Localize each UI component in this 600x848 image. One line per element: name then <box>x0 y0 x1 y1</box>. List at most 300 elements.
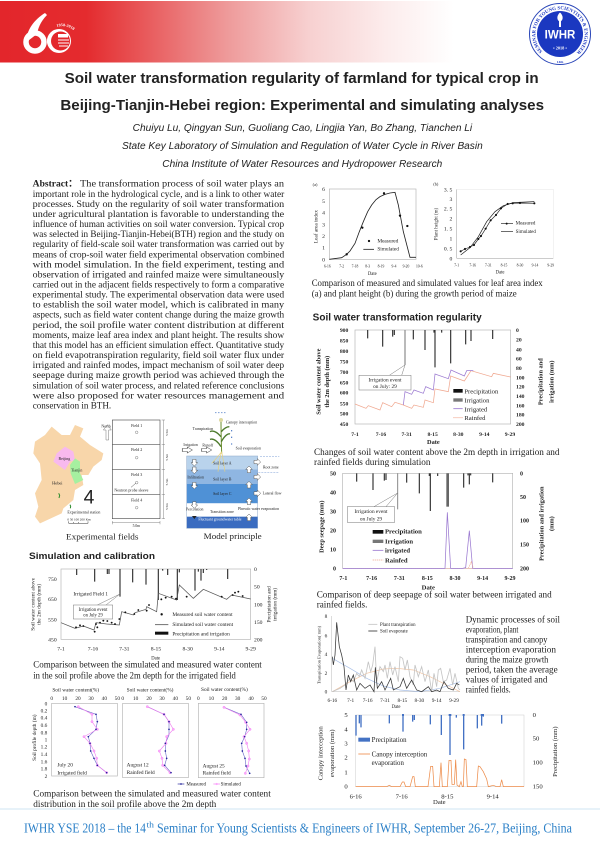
experimental fields: map <box>33 425 103 523</box>
chart b: plant height: 7-1 <box>454 264 459 268</box>
abstract text: seepage during maize growth period was achieved through the <box>33 371 284 381</box>
legend: irrigated <box>385 548 410 555</box>
callout: irrigation event <box>359 365 411 390</box>
chart: canopy interception evaporation: 4 <box>344 726 348 733</box>
chart: soil water content under irrigation and rainfed: the 2m depth (mm) <box>324 356 331 408</box>
legend <box>501 222 536 235</box>
experimental fields: field layout: North <box>101 424 111 429</box>
legend: Irrigated <box>464 406 488 413</box>
chart: soil water content, irrigated field: 150 <box>254 620 263 626</box>
chart: evaporation and transpiration: 6 <box>325 633 328 639</box>
chart a: leaf area index: 5 <box>322 199 325 205</box>
chart: soil water content, irrigated field: the 2m depth (mm) <box>35 584 42 625</box>
chart: soil water content under irrigation and rainfed: 700 <box>340 370 349 376</box>
legend: Simulated <box>516 230 536 235</box>
abstract text: simulation of soil water process, and related reference conclusions <box>33 380 285 391</box>
precipitation bars <box>77 569 228 600</box>
chart: soil water content under irrigation and rainfed: 850 <box>340 339 349 345</box>
chart: soil water content, irrigated field: 550 <box>48 617 57 623</box>
chart: soil water content under irrigation and rainfed: 500 <box>340 412 349 418</box>
legend: Plant transpiration <box>380 623 416 628</box>
chart b: plant height: 9-29 <box>547 264 554 268</box>
chart: soil profile water content distribution: 2 <box>45 774 48 780</box>
chart: soil water content under irrigation and rainfed: 600 <box>340 391 349 397</box>
chart a: leaf area index: 2 <box>322 234 325 240</box>
chart: soil profile water content distribution: 20 <box>222 696 228 702</box>
caption: profile comparison: distribution in the soil profile above the 2m depth <box>33 799 217 810</box>
legend: Simulated <box>221 783 241 788</box>
precipitation bars <box>356 715 502 755</box>
text block: dynamic processes: evaporation, plant <box>466 625 519 636</box>
model principle diagram: Soil evaporation <box>236 446 261 450</box>
chart a: leaf area index <box>312 182 423 277</box>
logo: IWHR YSE badge: 14th <box>557 60 563 64</box>
chart b: plant height: 9-14 <box>532 264 539 268</box>
chart a: leaf area index: 8-19 <box>378 265 385 269</box>
chart: soil profile water content distribution: 0 <box>45 701 48 707</box>
chart: canopy interception evaporation: 150 <box>533 784 543 791</box>
chart: soil water content, irrigated field: 650 <box>48 597 57 603</box>
abstract text: irrigated and rainfed modes, impact mechanism of soil water deep <box>33 360 285 371</box>
experimental fields: field layout: Neutron probe sleeve <box>114 488 149 493</box>
chart a: leaf area index: Date <box>368 272 377 277</box>
chart: soil water content under irrigation and rainfed: 7-16 <box>376 432 386 438</box>
chart a: leaf area index: 7-18 <box>352 265 359 269</box>
chart: soil water content, irrigated field: Date <box>151 656 160 661</box>
abstract text: to establish the soil water model, which is calibrated in many <box>33 301 285 311</box>
chart: soil water content under irrigation and rainfed: 160 <box>516 403 525 409</box>
precipitation and irrigation bars <box>368 330 493 367</box>
chart b: plant height: 2. 5 <box>444 207 453 213</box>
chart: soil water content under irrigation and rainfed: 450 <box>340 422 349 428</box>
legend: Measured <box>516 222 536 227</box>
chart: soil water content, irrigated field: 750 <box>48 577 57 583</box>
chart: evaporation and transpiration: 7-16 <box>363 698 373 704</box>
model principle diagram: Root zone <box>263 465 279 469</box>
abstract text: aspects, such as field water content change during the maize growth <box>33 310 285 321</box>
chart: soil profile water content distribution: Soil water content(%) <box>127 686 174 693</box>
caption: irrigation vs rainfed: Changes of soil water content above the 2m depth in irrigation and <box>314 447 560 458</box>
chart: soil water content, irrigated field: 7-16 <box>88 647 98 653</box>
chart: soil water content under irrigation and rainfed: 7-1 <box>351 432 359 438</box>
chart: soil water content under irrigation and rainfed: 550 <box>340 401 349 407</box>
legend <box>363 239 399 252</box>
header banner <box>0 1 454 62</box>
chart: soil profile water content distribution: 40 <box>248 696 254 702</box>
abstract text: that this model has an efficient simulation effect. Quantitative study <box>33 340 285 351</box>
legend: Precipitation <box>372 737 407 744</box>
chart: canopy interception evaporation: Precipitation (mm) <box>552 726 559 777</box>
text block: dynamic processes <box>466 615 560 695</box>
chart: deep seepage: 7-1 <box>339 576 347 582</box>
legend <box>155 612 234 637</box>
legend <box>358 737 428 767</box>
chart: soil profile water content distribution: Rainfed field <box>127 769 155 776</box>
legend: Precipitation <box>464 388 499 395</box>
chart: canopy interception evaporation: 0 <box>344 784 348 791</box>
model principle diagram: Transition zone <box>210 510 234 514</box>
model principle diagram: Soil layer A <box>213 462 232 466</box>
abstract text: on field evapotranspiration regularity, field soil water flux under <box>33 350 285 361</box>
chart: evaporation and transpiration: 0 <box>325 690 328 696</box>
chart b: plant height <box>433 181 554 275</box>
chart: canopy interception evaporation: 5 <box>344 712 348 719</box>
chart: soil water content under irrigation and rainfed: 20 <box>516 338 522 344</box>
abstract text: under agricultural plantation is favorable to understanding the <box>33 209 284 220</box>
captions: experimental fields and model principle <box>66 531 262 542</box>
abstract text: influence of human activities on soil water conversion. Typical crop <box>33 219 285 230</box>
legend <box>368 623 416 635</box>
chart: evaporation and transpiration: 7-31 <box>380 698 390 704</box>
chart: deep seepage: 10 <box>330 547 336 553</box>
chart: deep seepage: Precipitation and irrigation <box>538 486 545 561</box>
chart a: leaf area index: 3 <box>322 222 325 228</box>
chart: soil water content under irrigation and rainfed: 750 <box>340 359 349 365</box>
chart: soil water content, irrigated field: Irrigated Field 1 <box>73 591 108 597</box>
chart: deep seepage: 9-29 <box>505 576 515 582</box>
experimental fields: field layout <box>101 420 169 528</box>
chart: canopy interception evaporation: evaporation (mm) <box>329 729 336 777</box>
chart: soil profile water content distribution: 30 <box>88 696 94 702</box>
chart: soil water content, irrigated field: 7-1 <box>57 647 65 653</box>
chart: soil water content under irrigation and rainfed: 200 <box>516 422 525 428</box>
chart: deep seepage: 7-16 <box>366 576 377 582</box>
experimental fields: field layout: Field 2 <box>131 447 142 452</box>
experimental fields: map: Experimental station <box>67 510 100 515</box>
model principle diagram: Runoff <box>202 444 214 448</box>
abstract text: means of crop-soil water field experimental observation combined <box>33 249 285 260</box>
caption: irrigated field comparison: Comparison between the simulated and measured water content <box>33 660 262 670</box>
chart: soil water content under irrigation and rainfed: 9-14 <box>479 432 490 438</box>
chart: soil water content under irrigation and rainfed: 8-30 <box>453 432 464 438</box>
abstract text: experimental study. The experimental observation data were used <box>33 291 285 301</box>
chart: soil water content, irrigated field: 450 <box>48 637 57 643</box>
abstract text: was selected in Beijing-Tianjin-Hebei(BTH) region and the study on <box>33 229 284 240</box>
chart: evaporation and transpiration: 4 <box>325 652 328 658</box>
caption: deep seepage: rainfed fields. <box>317 600 367 610</box>
model principle diagram: Soil layer C <box>213 492 232 496</box>
experimental fields: field layout: 5.5m <box>165 478 169 485</box>
chart: evaporation and transpiration: 9-29 <box>449 698 459 704</box>
model principle diagram: Infiltration <box>187 476 204 480</box>
chart: deep seepage: 20 <box>330 528 336 534</box>
chart: soil profile water content distribution: 50 <box>186 696 191 702</box>
chart: soil profile water content distribution: July 20 <box>57 762 73 768</box>
heading: soil water transformation regularity: Soil water transformation regularity <box>313 313 482 324</box>
logo: IWHR YSE badge: • 2018 • <box>553 46 567 50</box>
chart: soil water content, irrigated field: irrigation (mm) <box>271 588 278 621</box>
callout: irrigation event: on July 29 <box>83 614 103 619</box>
chart: deep seepage: 8-30 <box>450 576 460 582</box>
chart a: leaf area index: (a) <box>313 182 318 187</box>
experimental fields: field layout: Field 3 <box>131 472 142 477</box>
chart: soil water content, irrigated field: 200 <box>254 637 263 643</box>
chart: soil water content, irrigated field: Soil water content above <box>31 577 37 631</box>
caption: deep seepage <box>317 590 552 610</box>
experimental fields: map: Beijing <box>58 456 70 461</box>
chart a: leaf area index: 9-4 <box>392 265 397 269</box>
experimental fields: field layout: 5.5m <box>165 429 169 436</box>
chart: evaporation and transpiration: Date <box>392 705 400 710</box>
caption: irrigated field comparison: in the soil profile above the 2m depth for the irrigated field <box>33 670 236 681</box>
title: Beijing-Tianjin-Hebei region: Experimental and simulating analyses <box>60 98 544 114</box>
legend: Precipitation and irrigation <box>172 631 230 637</box>
chart: soil water content under irrigation and rainfed: 9-29 <box>505 432 515 438</box>
chart a: leaf area index: 10-6 <box>416 265 423 269</box>
authors and affiliations: China Institute of Water Resources and Hydropower Research <box>162 159 442 170</box>
caption: LAI and plant height <box>312 278 543 300</box>
chart: soil water content under irrigation and rainfed: 140 <box>516 394 525 400</box>
legend: Irrigation <box>464 397 490 404</box>
chart: canopy interception evaporation: 9-14 <box>487 793 499 800</box>
chart: soil water content, irrigated field: 9-14 <box>214 647 225 653</box>
chart b: plant height: 2 <box>450 217 453 223</box>
abstract text: observation of irrigated and rainfed maize were simultaneously <box>33 269 285 280</box>
chart: soil water content, irrigated field: 9-29 <box>245 647 256 653</box>
model principle diagram: Phreatic water evaporation <box>238 507 279 511</box>
text block: dynamic processes: interception evaporation <box>466 645 556 656</box>
chart: soil profile water content distribution: 1.4 <box>41 752 48 758</box>
chart: soil profile water content distribution: 0.6 <box>41 723 48 729</box>
chart: soil water content under irrigation and rainfed: 180 <box>516 413 525 419</box>
chart b: plant height: 3 <box>450 197 453 203</box>
chart b: plant height: 1. 5 <box>444 227 453 233</box>
chart: evaporation and transpiration: 8 <box>325 614 328 620</box>
chart a: leaf area index: 8-3 <box>365 265 370 269</box>
logo: 60th anniversary <box>23 13 75 54</box>
heading: simulation and calibration: Simulation and calibration <box>29 551 155 562</box>
legend: Irrigation <box>385 538 413 545</box>
chart b: plant height: 1 <box>450 237 453 243</box>
chart: evaporation and transpiration: Transpiration Evaporation( mm) <box>316 625 321 684</box>
chart: deep seepage: 40 <box>330 490 336 496</box>
chart: soil profile water content distribution: 50 <box>115 696 120 702</box>
chart: soil profile water content distribution: Soil profile depth (m) <box>31 714 38 761</box>
chart: deep seepage: 0 <box>333 566 336 572</box>
callout: irrigation event: Irrigation event <box>354 509 388 515</box>
footer text: th <box>146 820 154 830</box>
caption: profile comparison <box>33 789 271 810</box>
chart a: leaf area index: Leaf area index <box>312 210 319 243</box>
chart: soil profile water content distribution: 0 <box>50 696 53 702</box>
chart: soil profile water content distribution: 30 <box>159 696 165 702</box>
model principle diagram: Soil layer B <box>213 477 232 481</box>
chart: soil profile water content distribution: 20 <box>146 696 152 702</box>
abstract text: with model simulation. In the field experiment, testing and <box>33 259 285 270</box>
abstract text: carried out in the adjacent fields respectively to form a comparative <box>33 280 284 290</box>
chart: soil profile water content distribution: 0 <box>197 696 200 702</box>
chart: soil profile water content distribution: 50 <box>261 696 267 702</box>
captions: experimental fields and model principle: Experimental fields <box>66 532 138 542</box>
legend: Measured <box>186 783 206 788</box>
authors and affiliations <box>122 123 483 170</box>
chart: soil water content under irrigation and rainfed: 7-31 <box>401 432 412 438</box>
chart: soil profile water content distribution <box>31 686 267 788</box>
chart a: leaf area index: 1 <box>322 246 325 252</box>
caption: LAI and plant height: Comparison of measured and simulated values for leaf area index <box>312 278 543 289</box>
chart: soil profile water content distribution: 40 <box>102 696 107 702</box>
legend: Simulated <box>377 246 399 252</box>
chart: evaporation and transpiration: 7-1 <box>347 698 355 704</box>
chart b: plant height: 8-15 <box>501 264 508 268</box>
chart: soil water content, irrigated field: 100 <box>254 602 263 608</box>
chart: evaporation and transpiration: 8-15 <box>397 698 408 704</box>
chart: evaporation and transpiration: 9-14 <box>432 698 442 704</box>
abstract text <box>33 179 285 411</box>
text block: dynamic processes: during the maize growth <box>466 654 549 665</box>
experimental fields: field layout: 5.5m <box>165 454 169 461</box>
chart: evaporation and transpiration: 8-30 <box>414 698 425 704</box>
chart: soil profile water content distribution: 0.8 <box>41 730 48 736</box>
chart: deep seepage <box>318 471 555 592</box>
chart: canopy interception evaporation: 7-16 <box>396 793 408 800</box>
chart: soil profile water content distribution: 10 <box>209 696 214 702</box>
chart b: plant height: 0 <box>450 256 453 262</box>
chart: canopy interception evaporation <box>318 712 559 806</box>
experimental fields: field layout: 5.5m <box>165 503 169 510</box>
chart: soil water content under irrigation and rainfed: 100 <box>516 375 525 381</box>
chart: soil water content under irrigation and rainfed: 120 <box>516 385 525 391</box>
title: Soil water transformation regularity of farmland for typical crop in <box>65 71 539 87</box>
chart: soil profile water content distribution: August 12 <box>127 762 149 768</box>
chart: soil profile water content distribution: 1.2 <box>41 745 48 751</box>
chart a: leaf area index: 9-20 <box>403 265 410 269</box>
chart: soil water content under irrigation and rainfed: 0 <box>516 328 519 334</box>
footer text: IWHR YSE 2018 – the 14 <box>24 820 146 836</box>
chart: soil water content under irrigation and rainfed: 60 <box>516 357 522 363</box>
chart: deep seepage: 200 <box>520 566 529 572</box>
chart b: plant height: Date <box>496 270 504 275</box>
legend: Rainfed <box>385 557 408 564</box>
chart: soil profile water content distribution: Irrigated field <box>57 769 87 776</box>
experimental fields: field layout: Field 4 <box>131 497 142 502</box>
experimental fields: field layout: 5.0m <box>133 524 140 528</box>
callout: irrigation event: on July 29 <box>360 516 382 522</box>
chart: canopy interception evaporation: 100 <box>533 759 543 766</box>
chart: soil profile water content distribution: 10 <box>62 696 68 702</box>
abstract text: regularity of field-scale soil water transformation was carried out by <box>33 239 284 250</box>
chart: deep seepage: Deep seepage (mm) <box>318 500 325 553</box>
chart: canopy interception evaporation: 2 <box>344 755 348 762</box>
chart: deep seepage: 7-31 <box>394 576 405 582</box>
chart: soil water content, irrigated field: 8-30 <box>182 647 193 653</box>
logo: IWHR YSE badge: IWHR <box>545 30 576 42</box>
legend: Canopy interception <box>372 752 428 759</box>
callout: irrigation event: Irrigation event <box>368 377 402 383</box>
caption: profile comparison: Comparison between the simulated and measured water content <box>33 789 271 799</box>
chart b: plant height: (b) <box>433 181 439 186</box>
chart: soil profile water content distribution: 40 <box>173 696 178 702</box>
chart: soil profile water content distribution: 1.6 <box>41 759 48 765</box>
chart b: plant height: Plant height (m) <box>434 207 439 240</box>
chart: soil water content, irrigated field <box>31 567 278 661</box>
experimental fields: map: Tianjin <box>71 468 82 473</box>
chart: soil water content, irrigated field: 7-31 <box>119 647 130 653</box>
chart: soil water content under irrigation and rainfed: 650 <box>340 380 349 386</box>
chart: soil water content, irrigated field: 50 <box>254 585 260 591</box>
model principle diagram: Fluctuant groundwater table <box>198 518 242 522</box>
experimental fields: map: Hebei <box>52 481 63 486</box>
model principle diagram: Canopy interception <box>226 420 257 424</box>
captions: experimental fields and model principle: Model principle <box>204 531 262 541</box>
chart: soil water content under irrigation and rainfed: Soil water content above <box>316 348 323 415</box>
abstract text: conservation in BTH. <box>33 401 111 411</box>
abstract text: Abstract： <box>33 180 78 190</box>
chart b: plant height: 0. 5 <box>444 247 453 253</box>
legend: Measured soil water content <box>172 612 233 618</box>
logo: 60th anniversary: 1958-2018 <box>56 24 75 30</box>
legend: evaporation <box>372 760 404 767</box>
chart: canopy interception evaporation: 50 <box>533 735 540 742</box>
abstract text: period, the soil profile water content distribution at different <box>33 320 285 331</box>
chart: evaporation and transpiration: 2 <box>325 671 328 677</box>
chart: deep seepage: 150 <box>520 543 529 549</box>
legend: Simulated soil water content <box>172 622 234 628</box>
chart: soil profile water content distribution: 1 <box>45 738 48 744</box>
legend: Measured <box>377 239 399 245</box>
model principle diagram: Lateral flow <box>263 491 282 495</box>
experimental fields: field layout: Field 1 <box>131 423 142 428</box>
abstract text: were also proposed for water resources management and <box>33 390 285 401</box>
chart: evaporation and transpiration: 6-16 <box>327 698 338 704</box>
text block: dynamic processes: transpiration and canopy <box>466 635 548 646</box>
chart: soil water content under irrigation and rainfed <box>316 328 555 446</box>
footer rule <box>0 808 600 810</box>
chart: soil water content under irrigation and rainfed: irrigation (mm) <box>548 360 555 403</box>
chart: soil profile water content distribution: 30 <box>235 696 241 702</box>
model principle diagram: Transpiration <box>193 427 213 431</box>
chart: soil water content, irrigated field: 8-15 <box>151 647 161 653</box>
caption: irrigation vs rainfed: rainfed fields during simulation <box>314 457 431 468</box>
text block: dynamic processes: period, taken the average <box>466 664 558 675</box>
chart: soil profile water content distribution: Soil water content(%) <box>201 686 248 693</box>
chart: soil water content under irrigation and rainfed: 800 <box>340 349 349 355</box>
legend: Rainfed <box>464 415 486 422</box>
chart: deep seepage: 9-14 <box>477 576 488 582</box>
chart: deep seepage: 30 <box>330 509 336 515</box>
chart: evaporation and transpiration <box>316 614 460 710</box>
chart b: plant height: 7-31 <box>485 264 492 268</box>
chart a: leaf area index: 0 <box>322 257 325 263</box>
caption: LAI and plant height: (a) and plant height (b) during the growth period of maize <box>312 289 517 300</box>
chart: canopy interception evaporation: 6-16 <box>350 793 362 800</box>
text block: dynamic processes: rainfed fields. <box>466 684 511 695</box>
chart: canopy interception evaporation: 8-15 <box>441 793 454 800</box>
chart: canopy interception evaporation: Date <box>433 799 446 806</box>
chart: soil profile water content distribution: Soil water content(%) <box>52 686 99 693</box>
chart: deep seepage: 50 <box>330 471 336 477</box>
callout: irrigation event: on July: 29 <box>373 384 397 390</box>
callout: irrigation event <box>73 594 120 619</box>
chart: soil water content under irrigation and rainfed: 900 <box>340 328 349 334</box>
chart: deep seepage: 100 <box>520 519 529 525</box>
model principle diagram: Irrigation <box>183 443 198 447</box>
experimental fields: map: 0 50 100 200 Km <box>67 517 91 521</box>
authors and affiliations: State Key Laboratory of Simulation and Regulation of Water Cycle in River Basin <box>122 141 483 152</box>
chart b: plant height: 7-16 <box>469 264 476 268</box>
legend: Precipitation <box>385 529 422 536</box>
precipitation and irrigation bars <box>357 473 493 511</box>
logo: IWHR YSE badge <box>529 3 591 65</box>
chart: soil profile water content distribution: August 25 <box>203 763 225 769</box>
abstract text: important role in the hydrological cycle, and is a link to other water <box>33 190 285 200</box>
text block: dynamic processes: values of irrigated and <box>466 674 548 685</box>
chart: soil water content, irrigated field: Precipitation and <box>267 586 273 622</box>
chart: soil water content under irrigation and rainfed: Precipitation and <box>538 358 545 405</box>
chart: deep seepage: 0 <box>520 471 523 477</box>
callout: irrigation event <box>347 493 398 522</box>
chart: soil profile water content distribution: 10 <box>133 696 139 702</box>
